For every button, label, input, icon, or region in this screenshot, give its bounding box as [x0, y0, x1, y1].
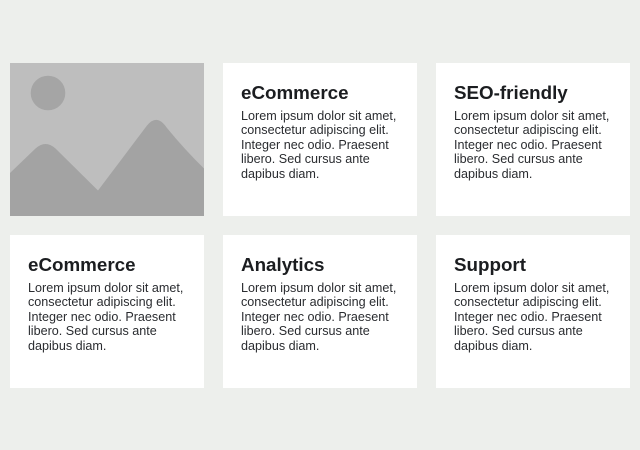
body text	[454, 281, 609, 353]
body text: Integer nec odio. Praesent	[454, 138, 602, 152]
icon: sun	[30, 75, 65, 110]
icon: mountains	[10, 119, 204, 216]
card: eCommerce bottom	[10, 234, 204, 388]
card: Support	[436, 234, 630, 388]
card: SEO-friendly	[436, 62, 630, 216]
body text: libero. Sed cursus ante	[241, 324, 370, 338]
body text: consectetur adipiscing elit.	[241, 295, 389, 309]
body text: libero. Sed cursus ante	[454, 324, 583, 338]
heading: SEO-friendly	[454, 82, 568, 102]
body text: Integer nec odio. Praesent	[241, 138, 389, 152]
body text: libero. Sed cursus ante	[241, 152, 370, 166]
body text	[28, 281, 183, 353]
body text: dapibus diam.	[454, 167, 532, 181]
body text: Lorem ipsum dolor sit amet,	[28, 281, 183, 295]
card: eCommerce top	[222, 62, 417, 216]
body text: Lorem ipsum dolor sit amet,	[241, 281, 396, 295]
body text	[454, 109, 609, 181]
body text: consectetur adipiscing elit.	[241, 123, 389, 137]
heading: Analytics	[241, 254, 325, 274]
body text: dapibus diam.	[454, 339, 532, 353]
heading: eCommerce	[241, 82, 349, 102]
body text: Integer nec odio. Praesent	[28, 310, 176, 324]
body text: libero. Sed cursus ante	[454, 152, 583, 166]
body text: dapibus diam.	[241, 339, 319, 353]
body text: Integer nec odio. Praesent	[241, 310, 389, 324]
heading: Support	[454, 254, 526, 274]
body text: libero. Sed cursus ante	[28, 324, 157, 338]
body text: consectetur adipiscing elit.	[454, 295, 602, 309]
body text: dapibus diam.	[28, 339, 106, 353]
body text: Lorem ipsum dolor sit amet,	[454, 109, 609, 123]
body text: consectetur adipiscing elit.	[454, 123, 602, 137]
body text: consectetur adipiscing elit.	[28, 295, 176, 309]
card: Analytics	[222, 234, 417, 388]
body text: dapibus diam.	[241, 167, 319, 181]
body text	[241, 109, 396, 181]
body text: Lorem ipsum dolor sit amet,	[241, 109, 396, 123]
body text: Lorem ipsum dolor sit amet,	[454, 281, 609, 295]
body text	[241, 281, 396, 353]
image placeholder panel	[10, 63, 204, 216]
heading: eCommerce	[28, 254, 136, 274]
body text: Integer nec odio. Praesent	[454, 310, 602, 324]
